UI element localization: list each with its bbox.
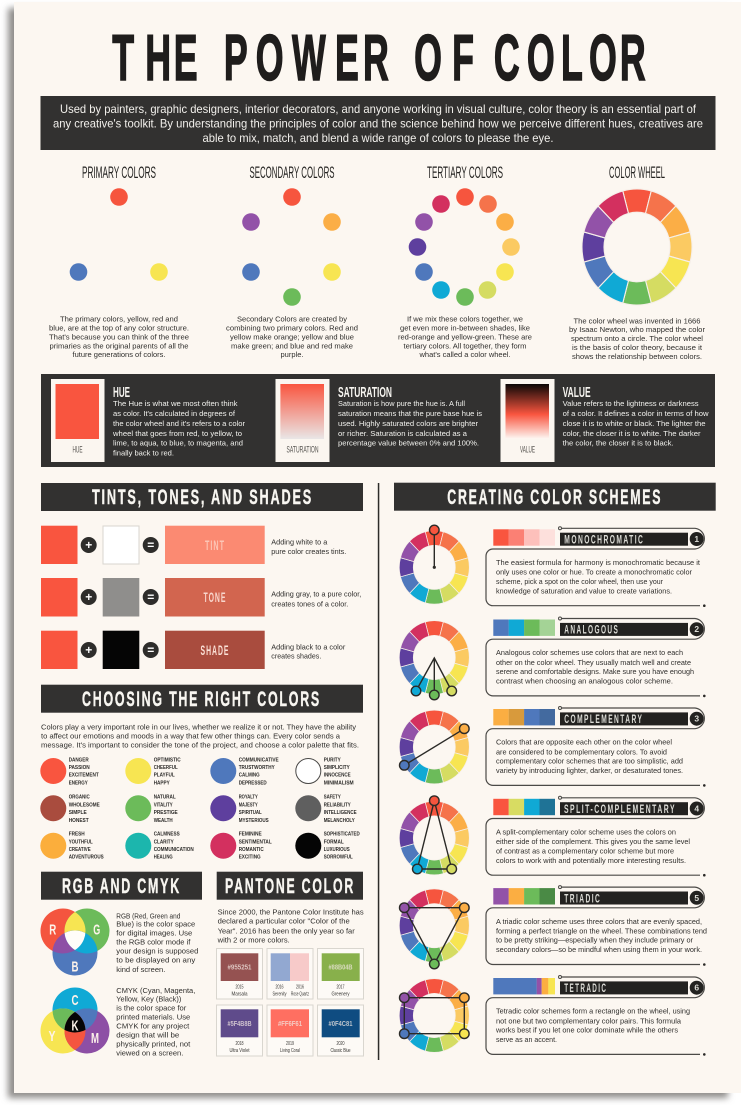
wheel: monochromatic [399,525,469,604]
color meanings: row 3: FORMAL [324,839,344,845]
primary description: blue, are at the top of any color structure. [49,323,189,332]
panel: rgb and cmyk [40,872,202,1057]
cmyk description: design that will be [116,1031,179,1040]
secondary description: purple. [280,350,304,359]
panel: secondary colors [226,163,358,359]
value block: the color, the closer it is to black. [563,438,674,448]
color meanings: row 1: CALMING [239,773,260,779]
color meanings: row 3: EXCITING [239,855,261,861]
color meanings: row 2: NATURAL [154,795,176,801]
pantone description [217,908,364,945]
color meanings: row 3: LUXURIOUS [324,847,350,853]
panel: creating color schemes [394,483,716,1056]
saturation block: used. Highly saturated colors are brighter [338,419,479,428]
pantone card 2018: Ultra Violet [230,1048,250,1054]
wheel: split-complementary [399,796,469,875]
scheme: monochromatic: knowledge of saturation and value to create variations. [496,586,672,595]
panel: hue saturation value [41,374,715,467]
scheme: triadic: to be pretty striking—especially when they include primary or [496,936,693,945]
hue block: the color wheel and it's refers to a color [113,419,246,428]
title: THE POWER OF COLOR [112,23,646,95]
color meanings: row 1: COMMUNICATIVE [239,757,279,763]
tone row: creates tones of a color. [271,600,348,609]
scheme: complementary [486,706,706,787]
heading: creating color schemes [394,483,716,511]
heading: tints tones shades [41,483,363,511]
choosing intro text: to affect our emotions and moods in a way that few other things can. Every color sends a [41,731,341,740]
value block: color, the closer it is to white. The darker [563,429,701,438]
tertiary description: what's called a color wheel. [419,350,510,359]
choosing intro text: message. It's important to consider the tone of the project, and choose a color palette that fits. [41,741,359,750]
color meanings: row 2: MAJESTY [239,802,258,808]
rgb description [116,911,198,974]
color meanings: row 1: TRUSTWORTHY [239,765,275,771]
cmyk venn diagram: Y [48,1028,56,1045]
rgb description: your design is supposed [116,947,198,956]
hue block: HUE [113,385,130,401]
scheme: complementary: variety by introducing lighter, darker, or desaturated tones. [496,766,683,775]
scheme: triadic [486,886,707,966]
cmyk description [116,986,195,1057]
color meanings: row 1: CHEERFUL [154,765,178,771]
color meanings: row 2: VITALITY [154,802,173,808]
color meanings: row 3: CALMNESS [154,832,180,838]
tint row: + [85,538,92,552]
scheme: monochromatic: only uses one color or hue. To create a monochromatic color [496,568,692,577]
heading: pantone color [217,872,363,900]
heading: rgb and cmyk [41,872,202,900]
pantone card 2020: #0F4C81 [328,1021,353,1028]
tint row: = [147,538,154,552]
scheme: tetradic: TETRADIC [564,983,607,995]
panel: primary colors: PRIMARY COLORS [82,163,156,182]
color meanings: row 1: EXCITEMENT [69,773,99,779]
color meanings: row 2: MYSTERIOUS [239,818,269,824]
scheme: split-complementary: 4 [694,804,699,814]
scheme: analogous: Analogous color schemes use colors that are next to each [496,648,683,657]
tint row [41,526,346,564]
scheme: triadic: A triadic color scheme uses three colors that are evenly spaced, [496,917,702,926]
color meanings: row 3: YOUTHFUL [69,839,93,845]
primary description: That's because you can think of the three [49,332,189,341]
pantone card 2018: #5F4B8B [228,1021,252,1028]
saturation block: saturation means that the pure base hue is [338,409,482,418]
scheme: analogous: contrast when choosing an analogous color scheme. [496,676,673,685]
pantone card 2017: 2017 [336,984,345,990]
hue block: as color. It's calculated in degrees of [113,409,236,418]
scheme: tetradic: 6 [694,983,699,993]
cmyk description: Yellow, Key (Black)) [116,995,182,1004]
color meanings: row 3: SORROWFUL [324,855,353,861]
cmyk venn diagram: M [91,1030,99,1047]
rgb description: the RGB color mode if [116,937,191,946]
cmyk description: printed materials. Use [116,1012,190,1021]
color meanings: row 3 [40,832,360,861]
shade row: + [85,643,92,657]
tone row: + [85,590,92,604]
panel: tints tones shades [41,483,363,669]
cmyk description: viewed on a screen. [116,1048,183,1057]
scheme: analogous [486,617,706,697]
wheel: complementary [399,710,469,784]
panel: color wheel [569,163,705,361]
scheme: monochromatic: The easiest formula for harmony is monochromatic because it [496,558,701,567]
wheel: analogous [399,621,469,700]
color meanings: row 2: ORGANIC [69,795,90,801]
pantone card 2015: #955251 [228,964,252,972]
pantone card 2017 [318,948,364,999]
scheme: complementary: are considered to be complementary colors. To avoid [496,747,667,756]
cmyk description: CMYK for any project [116,1022,190,1031]
secondary description: yellow make orange; yellow and blue [230,332,354,341]
panel: primary colors [49,163,189,359]
pantone card 2016: Rose Quartz [291,992,309,998]
rgb description: Blue) is the color space [116,920,195,929]
saturation block: or richer. Saturation is calculated as a [338,429,468,438]
color wheel description: spectrum onto a circle. The color wheel [571,334,703,343]
color meanings: row 1: ENERGY [69,781,88,787]
secondary description: make green; and blue and red make [231,341,353,350]
saturation block: percentage value between 0% and 100%. [338,438,479,448]
scheme: triadic: forming a perfect triangle on the wheel. These combinations tend [496,926,707,935]
panel: choosing the right colors [40,685,363,861]
panel: color wheel: COLOR WHEEL [609,163,665,182]
secondary dots [242,188,341,306]
color meanings: row 1: DANGER [69,757,89,763]
panel: secondary colors: SECONDARY COLORS [250,163,334,182]
rgb venn diagram: G [93,922,100,938]
value block: close it is to white or black. The lighter the [563,419,706,428]
color meanings: row 1: PURITY [324,757,341,763]
scheme: split-complementary [486,796,706,876]
value block: VALUE [520,444,535,454]
intro banner [40,96,716,150]
scheme: analogous: serene and comfortable designs. Make sure you have enough [496,667,694,676]
tint row: pure color creates tints. [271,547,346,556]
pantone card 2019 [267,1005,313,1056]
scheme: complementary: Colors that are opposite each other on the color wheel [496,738,672,747]
pantone card 2018: 2018 [236,1041,244,1047]
color meanings: row 2: PRESTIGE [154,810,178,816]
heading: choosing the right colors: CHOOSING THE RIGHT COLORS [82,688,321,711]
pantone card 2016 [267,948,313,999]
pantone card 2017: Greenery [332,992,350,998]
scheme: monochromatic: 1 [694,534,699,544]
cmyk venn diagram: K [72,1018,79,1034]
scheme: split-complementary: A split-complementary color scheme uses the colors on [496,828,676,836]
color meanings: row 1: OPTIMISTIC [154,757,181,763]
color meanings: row 2: HONEST [69,818,89,824]
pantone card 2016: 2016 [276,984,284,990]
tint row: TINT [205,537,225,553]
scheme: split-complementary: colors to work with and potentially more interesting results. [496,856,686,865]
secondary description: Secondary Colors are created by [237,314,347,323]
primary description: future generations of colors. [72,350,166,359]
scheme: tetradic: serve as an accent. [496,1035,557,1044]
pantone description: with 2 or more colors. [217,936,290,945]
saturation block: Saturation is how pure the hue is. A full [338,399,465,408]
shade row: = [147,643,154,657]
pantone description: Year". 2016 has been the only year so far [218,926,355,935]
color meanings: row 2: MELANCHOLY [324,818,355,824]
choosing intro text: Colors play a very important role in our lives, whether we realize it or not. They have the ability [41,723,356,732]
color meanings: row 2: ROYALTY [239,795,258,801]
intro banner: able to mix, match, and blend a wide range of colors to please the eye. [202,131,554,145]
intro banner: any creative's toolkit. By understanding the principles of color and the science behind how we perceive different hues, creatives are [53,116,703,130]
scheme: triadic: 5 [694,893,699,903]
panel: tertiary colors: TERTIARY COLORS [427,163,503,182]
pantone description: Since 2000, the Pantone Color Institute has [218,908,364,917]
heading: choosing the right colors [41,685,363,713]
cmyk description: CMYK (Cyan, Magenta, [116,986,195,995]
pantone card 2015 [216,948,262,999]
panel: pantone color [216,872,364,1056]
tertiary description: get even more in-between shades, like [400,323,530,332]
color meanings: row 2: WEALTH [154,818,173,824]
tone row: Adding gray, to a pure color, [271,590,361,599]
scheme: split-complementary: either side of the complement. This gives you the same level [496,837,690,846]
scheme: analogous: ANALOGOUS [564,625,619,637]
color wheel description: shows the relationship between colors. [572,352,702,361]
scheme: complementary: 3 [694,714,699,724]
color meanings: row 3: COMMUNICATION [154,847,194,853]
color meanings: row 2: SIMPLE [69,810,87,816]
scheme: monochromatic: scheme, pick a spot on the color wheel, then use your [496,577,663,586]
large color wheel [582,189,692,305]
cmyk venn diagram: C [72,992,79,1009]
primary description: The primary colors, yellow, red and [60,314,178,323]
scheme: tetradic [486,976,706,1056]
intro banner: Used by painters, graphic designers, interior decorators, and anyone working in visual culture, color theory is an essential part of [60,102,697,116]
saturation block: SATURATION [338,385,392,401]
scheme: monochromatic [486,527,706,607]
rgb venn diagram: B [72,958,79,976]
pantone card 2019: Living Coral [280,1048,300,1054]
color meanings: row 1: PASSION [69,765,90,771]
wheel: tetradic [399,979,469,1052]
scheme: complementary: COMPLEMENTARY [564,714,643,726]
saturation block: SATURATION [286,444,318,454]
value block [500,379,709,462]
scheme: triadic: TRIADIC [564,893,601,905]
color wheel description [569,316,705,361]
cmyk description: physically printed, not [116,1040,191,1049]
color meanings: row 3: SOPHISTICATED [324,832,360,838]
color meanings: row 1: SIMPLICITY [324,765,350,771]
shade row [41,631,346,669]
primary dots [70,188,168,281]
tertiary description: tertiary colors. All together, they form [404,341,526,350]
pantone card 2020: Classic Blue [330,1048,351,1054]
scheme: triadic: secondary colors—so be mindful when using them in your work. [496,945,702,954]
color meanings: row 2: SAFETY [324,795,341,801]
color meanings: row 3: CREATIVE [69,847,91,853]
scheme: tetradic: Tetradic color schemes form a rectangle on the wheel, using [496,1007,690,1016]
color wheel description: by Isaac Newton, who mapped the color [569,325,705,334]
shade row: creates shades. [271,652,321,661]
color meanings: row 1: PLAYFUL [154,773,175,779]
color meanings: row 3: ROMANTIC [239,847,264,853]
pantone card 2019: #FF6F61 [278,1021,302,1028]
pantone card 2020: 2020 [336,1041,345,1047]
panel: tertiary colors [398,163,532,359]
scheme: split-complementary: of contrast as a complementary color scheme but more [496,846,674,855]
wheel: triadic [399,889,469,969]
heading: tints tones shades: TINTS, TONES, AND SHADES [92,486,313,509]
color meanings: row 3: CLARITY [154,839,174,845]
shade row: SHADE [200,642,230,658]
hue block: finally back to red. [113,448,174,458]
cmyk description: is the color space for [116,1003,187,1012]
scheme: tetradic: works best if you let one color dominate while the others [495,1026,678,1035]
tone row: TONE [204,589,226,605]
tertiary description: If we mix these colors together, we [407,314,523,323]
heading: rgb and cmyk: RGB AND CMYK [62,875,181,898]
value block: of a color. It defines a color in terms of how [563,409,709,418]
secondary description [226,314,358,359]
tone row [41,578,361,616]
hue block: lime, to aqua, to blue, to magenta, and [113,438,243,448]
shade row: Adding black to a color [271,642,346,651]
pantone card 2020 [318,1005,364,1056]
value block: Value refers to the lightness or darkness [563,399,699,408]
tertiary dots [409,188,520,306]
color meanings: row 3: HEALING [154,855,173,861]
color meanings: row 2: SPIRITUAL [239,810,262,816]
tint row: Adding white to a [271,537,328,546]
secondary description: combining two primary colors. Red and [226,323,358,332]
color meanings: row 1: INNOCENCE [324,773,351,779]
primary description [49,314,189,359]
color meanings: row 2 [40,795,357,824]
color wheel description: is the basis of color theory, because it [572,343,703,352]
scheme: tetradic: not one but two complementary color pairs. This formula [496,1016,682,1025]
scheme: complementary: complementary color schemes that are too simplistic, add [496,757,683,766]
color meanings: row 3: ADVENTUROUS [69,855,104,861]
color meanings: row 1: MINIMALISM [324,781,354,787]
rgb description: RGB (Red, Green and [116,911,180,920]
cmyk venn diagram [40,988,110,1054]
value block: VALUE [563,385,591,401]
rgb description: to be displayed on any [116,956,196,965]
saturation block [276,379,482,462]
rgb venn diagram: R [49,922,56,938]
scheme: monochromatic: MONOCHROMATIC [564,534,644,546]
hue block: HUE [72,444,82,454]
pantone card 2016: 2016 [296,984,304,990]
rgb venn diagram [40,908,110,976]
pantone card 2015: 2015 [236,984,244,990]
color meanings: row 1 [40,757,354,787]
color meanings: row 2: RELIABILITY [324,802,351,808]
choosing intro text [41,723,359,750]
color meanings: row 3: FRESH [69,832,85,838]
primary description: primaries as the original parents of all the [50,341,189,350]
color meanings: row 2: WHOLESOME [69,802,100,808]
color meanings: row 3: FEMININE [239,832,262,838]
rgb description: kind of screen. [116,965,165,974]
scheme: analogous: other on the color wheel. They usually match well and create [496,658,691,667]
hue block [51,379,246,462]
color meanings: row 2: INTELLIGENCE [324,810,357,816]
tertiary description [398,314,532,359]
scheme: analogous: 2 [694,624,699,634]
pantone card 2019: 2019 [286,1041,294,1047]
rgb description: for digital images. Use [116,928,192,937]
pantone description: declared a particular color "Color of the [218,917,350,926]
heading: pantone color: PANTONE COLOR [225,875,355,898]
pantone card 2017: #88B04B [328,964,352,972]
tone row: = [147,590,154,604]
pantone card 2016: Serenity [272,992,287,998]
color meanings: row 1: HAPPY [154,781,170,787]
color wheel description: The color wheel was invented in 1666 [574,316,700,325]
hue block: The Hue is what we most often think [113,399,238,408]
color meanings: row 3: SENTIMENTAL [239,839,272,845]
tertiary description: red-orange and yellow-green. These are [398,332,532,341]
pantone card 2015: Marsala [232,992,248,998]
color meanings: row 1: DEPRESSED [239,781,267,787]
pantone card 2018 [216,1005,262,1056]
hue block: wheel that goes from red, to yellow, to [112,429,242,438]
